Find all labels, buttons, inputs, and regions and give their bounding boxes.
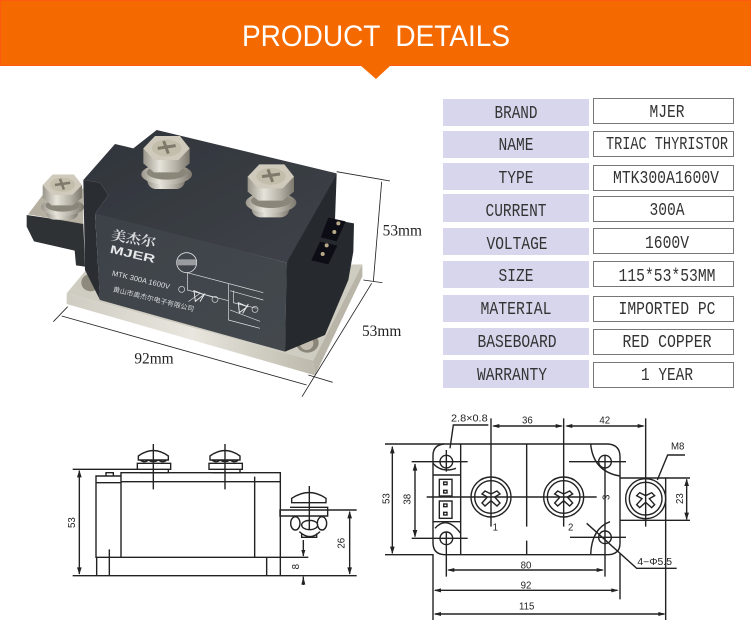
- label 38: 38: [403, 494, 414, 505]
- label 23: 23: [675, 493, 686, 504]
- current row: [443, 194, 734, 222]
- label 2: 2: [568, 523, 573, 534]
- banner bar: [0, 0, 750, 66]
- length label: 92mm: [134, 350, 174, 367]
- voltage row: [443, 228, 734, 255]
- label 115: 115: [519, 602, 534, 613]
- title: PRODUCT DETAILS: [242, 20, 510, 53]
- terminal two: [544, 477, 584, 517]
- height label: 53mm: [383, 222, 423, 239]
- material row: MATERIAL: [480, 300, 552, 320]
- label 80: 80: [521, 561, 531, 572]
- product photo with dimensions: [27, 130, 423, 397]
- centre and extension lines: [385, 418, 690, 620]
- baseboard row: RED COPPER: [622, 333, 712, 353]
- module body: [83, 130, 354, 352]
- connector blocks: [321, 218, 346, 241]
- top screw two: [246, 164, 296, 217]
- label 36: 36: [522, 416, 533, 427]
- type row: MTK300A1600V: [613, 169, 719, 189]
- depth label: 53mm: [362, 323, 402, 340]
- brand row: [443, 98, 734, 126]
- upper terminal two: [209, 444, 242, 489]
- label hole size: 4−Φ5.5: [637, 557, 672, 568]
- mounting holes: [440, 455, 611, 545]
- dimension 26: 26: [336, 538, 347, 549]
- top view drawing: [381, 413, 690, 620]
- right face: [285, 174, 354, 352]
- label 92: 92: [521, 581, 531, 592]
- label 1: 1: [493, 523, 498, 534]
- warranty row: WARRANTY: [477, 366, 547, 386]
- side terminal: [280, 486, 357, 537]
- dimension arrows: [79, 471, 350, 585]
- baseboard row: [443, 328, 734, 355]
- warranty row: [443, 360, 734, 388]
- left shoulder: [83, 180, 108, 300]
- label M8: M8: [671, 441, 684, 452]
- name row: [443, 131, 734, 158]
- dimension lines: [53, 172, 390, 397]
- dimension lines: [392, 425, 687, 614]
- dimension 8: 8: [291, 564, 302, 569]
- current row: CURRENT: [486, 202, 547, 222]
- label pin size: 2.8×0.8: [451, 413, 488, 424]
- side terminal: [620, 478, 666, 520]
- voltage row: VOLTAGE: [486, 235, 548, 255]
- label 3: 3: [601, 495, 612, 500]
- brand row: MJER: [650, 103, 685, 123]
- specification table: [443, 98, 734, 388]
- size row: [443, 261, 734, 288]
- current row: 300A: [650, 201, 685, 221]
- type row: TYPE: [498, 169, 534, 189]
- size row: 115*53*53MM: [618, 267, 716, 287]
- baseboard row: BASEBOARD: [478, 333, 556, 353]
- voltage row: 1600V: [645, 234, 689, 254]
- model number: MTK 300A 1600V: [111, 269, 171, 291]
- baseline extension lines: [73, 469, 357, 576]
- material row: IMPORTED PC: [618, 300, 716, 320]
- brand latin: MJER: [109, 244, 156, 266]
- header banner: [0, 0, 750, 79]
- mounting corner arcs: [433, 444, 620, 555]
- brand chinese: 美杰尔: [110, 227, 158, 250]
- banner pointer: [360, 65, 391, 79]
- dimension arrowheads: [390, 424, 689, 616]
- triac symbol one: [194, 291, 205, 302]
- front label: [109, 227, 263, 328]
- label 42: 42: [599, 416, 610, 427]
- warranty row: 1 YEAR: [641, 366, 693, 386]
- body outline: [433, 444, 620, 555]
- circuit diagram: [187, 273, 263, 328]
- name row: NAME: [498, 136, 534, 156]
- material row: [443, 295, 734, 322]
- connector pins: [439, 479, 452, 518]
- terminal one: [471, 477, 511, 517]
- top face: [83, 130, 337, 263]
- left terminal: [27, 175, 85, 267]
- body outline: [96, 473, 308, 576]
- front face: [95, 213, 287, 352]
- logo: [177, 253, 197, 273]
- triac symbol two: [238, 303, 248, 313]
- base plate: [67, 264, 362, 375]
- top screw one: [141, 136, 192, 189]
- brand row: BRAND: [494, 104, 538, 124]
- type row: [443, 163, 734, 190]
- dimension 53: 53: [67, 517, 78, 528]
- side view drawing: [67, 444, 357, 585]
- size row: SIZE: [498, 267, 534, 287]
- label 53: 53: [381, 493, 392, 504]
- upper terminal one: [137, 444, 171, 489]
- manufacturer: 黄山市奥杰尔电子有限公司: [112, 285, 195, 313]
